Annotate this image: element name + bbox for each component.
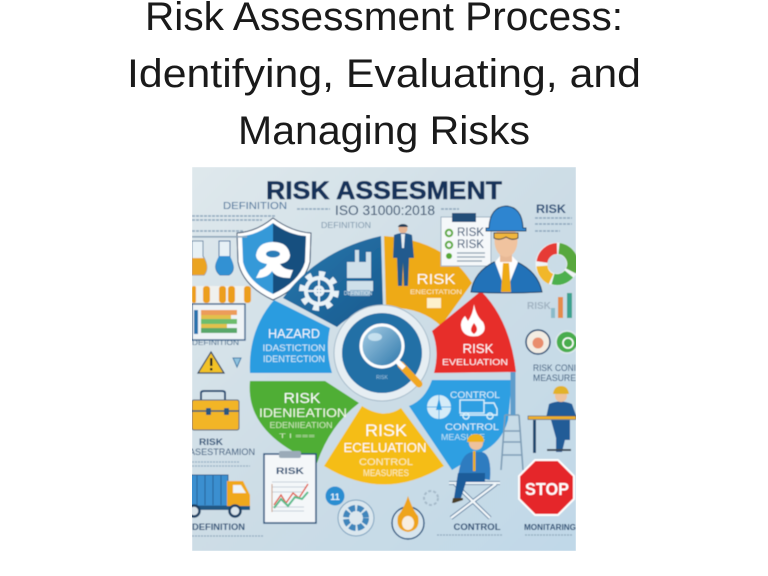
caption: definition smudge: DEFINITION <box>321 221 371 230</box>
icon: stepladder <box>501 372 523 470</box>
icon: clipboard checklist <box>441 213 491 266</box>
label: risk top right: RISK <box>536 202 566 216</box>
icon: risk clipboard chart <box>264 451 316 523</box>
icon: stop sign: STOP <box>525 479 569 499</box>
segment: hazard identification: HAZARD <box>268 327 320 341</box>
icon: small document <box>427 298 441 308</box>
segment: orange risk identification <box>384 224 472 326</box>
label: risk control measures: RISK CONI <box>533 363 576 373</box>
subheading: iso standard: ISO 31000:2018 <box>335 203 435 218</box>
icon: orange beaker <box>192 241 207 275</box>
label: risk control measures: MEASURE <box>533 373 576 383</box>
panel: shield <box>237 218 311 300</box>
title: Identifying, Evaluating, and <box>127 52 641 96</box>
segment: yellow risk evaluation: MEASURES <box>363 468 409 479</box>
icon: risk clipboard chart: RISK <box>276 466 304 477</box>
label: risk control measures <box>533 364 576 382</box>
icon: awning <box>196 286 246 304</box>
segment: red risk evaluation: EVELUATION <box>442 358 508 367</box>
title: Managing Risks <box>238 109 530 153</box>
segment: hazard identification: IDENTECTION <box>263 354 325 364</box>
segment: yellow risk evaluation: ECELUATION <box>344 441 426 455</box>
icon: shield emblem <box>256 242 293 278</box>
segment: hazard identification: IDASTICTION <box>262 343 326 353</box>
icon: magnifying glass center <box>334 305 430 401</box>
segment: control measures: MEASURE <box>441 433 485 442</box>
icon: location pin <box>233 358 241 367</box>
icon: engineer with hard hat <box>471 206 542 293</box>
icon: toolbox briefcase <box>192 391 239 430</box>
icon: blue beaker <box>216 241 233 275</box>
segment: control measures: CONTROL <box>450 390 500 400</box>
icon: number badge <box>326 486 344 506</box>
label: definition left: DEFINITION <box>192 338 239 347</box>
icon: warning triangle <box>198 352 224 373</box>
icon: worker at desk <box>528 386 577 453</box>
icon: magnifying glass center: RISK <box>376 375 388 381</box>
caption: gear: DEFINITION <box>344 291 373 297</box>
label: risk assestramion: RISK <box>199 437 223 448</box>
segment: green risk identification <box>250 381 359 463</box>
icon: truck <box>188 475 250 516</box>
label: risk assestramion <box>189 437 255 457</box>
segment: gear dark blue <box>283 236 383 327</box>
segment: control measures <box>409 380 512 470</box>
icon: clipboard checklist: RISK <box>457 239 484 251</box>
segment: orange risk identification: RISK <box>416 271 456 288</box>
segment: green risk identification: T I === <box>279 434 316 440</box>
panel: beakers <box>192 236 247 275</box>
icon: businessman <box>393 224 414 286</box>
caption lines <box>192 209 572 231</box>
title <box>127 0 641 153</box>
label: definition top: DEFINITION <box>223 200 287 212</box>
segment: red risk evaluation: RISK <box>462 342 494 356</box>
label: definition bottom: DEFINITION <box>192 522 245 532</box>
icon: blue ring gear <box>338 500 374 536</box>
label: control: CONTROL <box>454 522 501 532</box>
panel: infographic image <box>188 167 578 551</box>
icon: flame <box>461 304 485 336</box>
label: risk assestramion: ASESTRAMION <box>189 447 255 457</box>
label: monitoring: MONITARING <box>524 522 576 532</box>
segment: red risk evaluation <box>432 291 516 373</box>
caption lines bottom <box>192 535 572 536</box>
icon: stop sign <box>519 460 574 515</box>
icon: clipboard checklist: RISK <box>457 227 484 239</box>
chart: donut gauge <box>542 248 573 280</box>
icon: factory <box>347 250 373 296</box>
segment: green risk identification: RISK <box>284 390 320 407</box>
segment: green risk identification: EDENIIEATION <box>270 421 333 430</box>
chart: colored bars <box>194 310 237 334</box>
icon: gear <box>302 274 336 308</box>
segment: yellow risk evaluation <box>324 406 444 484</box>
chart: small bars: RISK <box>527 301 552 312</box>
icon: circle badges <box>526 330 578 354</box>
icon: number badge: 11 <box>330 492 340 502</box>
segment: yellow risk evaluation: RISK <box>365 421 408 440</box>
panel: market stall chart <box>192 286 251 340</box>
icon: flame droplet badge <box>392 496 424 539</box>
segment: hazard identification <box>250 300 332 373</box>
chart: small bars <box>527 293 572 318</box>
icon: seated worker on chair <box>449 434 500 518</box>
segment: yellow risk evaluation: CONTROL <box>359 457 413 468</box>
segment: green risk identification: IDENIEATION <box>259 408 347 420</box>
segment: control measures: CONTROL <box>445 422 499 433</box>
icon: truck <box>460 400 497 419</box>
heading: risk assessment: RISK ASSESMENT <box>266 177 502 205</box>
icon: faint gears sketch <box>424 491 438 505</box>
chart: line chart <box>274 484 308 505</box>
segment: orange risk identification: ENECITATION <box>410 289 462 296</box>
icon: compass <box>427 395 451 419</box>
